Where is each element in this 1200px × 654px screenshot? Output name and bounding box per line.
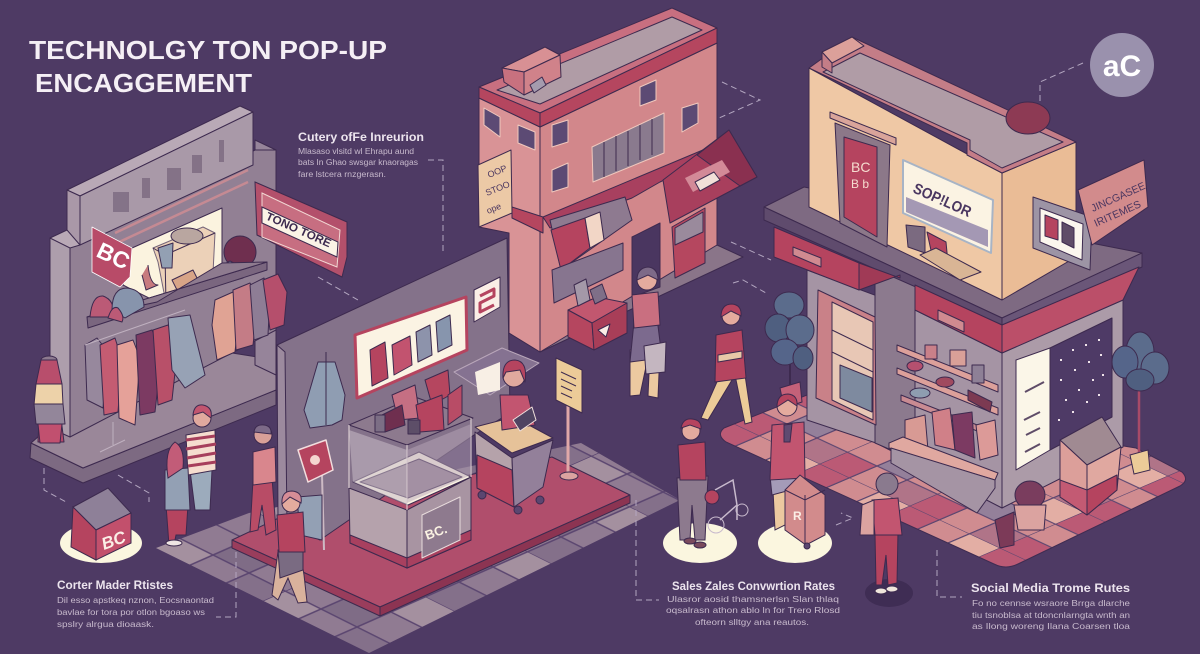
left wall	[479, 98, 540, 352]
person: woman with suitcase	[770, 394, 805, 530]
store window	[552, 243, 623, 303]
display panels	[1016, 318, 1112, 470]
right wall	[540, 43, 717, 352]
booth back walls	[50, 106, 276, 437]
shop hanging sign: ope	[485, 201, 503, 216]
roof hatch	[502, 47, 561, 95]
person: woman in red dress walking	[701, 304, 752, 424]
laptop desk	[906, 225, 981, 280]
icon: BC box	[71, 488, 131, 560]
jacket on wall	[304, 352, 345, 428]
sign stand with text	[556, 358, 582, 480]
red door	[672, 208, 705, 278]
plant: right tree	[1112, 332, 1169, 474]
small awning	[550, 197, 632, 270]
large awning	[663, 130, 757, 223]
panel: left clothing booth	[30, 106, 287, 483]
text block: social media rates: tiu tsnoblsa at tdoncnlarngta wnth an	[972, 610, 1130, 620]
text block: sales conversion rates: Sales Zales Convwrtion Rates	[672, 579, 835, 593]
shop hanging sign	[478, 150, 512, 227]
cashier desk	[475, 417, 553, 514]
icon: BC box: BC	[99, 527, 129, 554]
sign stand	[298, 440, 333, 550]
text block: corter mader rates: Dil esso apstkeq nznon, Eocsnaontad	[57, 595, 214, 605]
text block: social media rates: Social Media Trome Rutes	[971, 581, 1130, 595]
glass cabinet behind cashier	[454, 348, 539, 395]
hanging garments	[85, 274, 287, 452]
gift boxes on case	[375, 370, 462, 434]
text block: corter mader rates	[57, 578, 214, 629]
beige upper walls	[809, 68, 1002, 300]
bag on floor	[995, 481, 1046, 548]
slab	[764, 187, 1142, 318]
shop counter	[889, 437, 998, 513]
person: woman seen from behind	[860, 473, 913, 607]
BC flag logo	[92, 227, 134, 287]
booth wall	[277, 238, 510, 540]
person: cashier	[500, 360, 536, 431]
plant: centre tree	[765, 292, 814, 408]
text block: customer interaction: fare lstcera rnzgerasn.	[298, 169, 386, 179]
hanging product sign	[1033, 197, 1092, 270]
display case	[349, 397, 473, 568]
text block: corter mader rates: spslry alrgua dioaask.	[57, 619, 154, 629]
storefront screen	[903, 160, 993, 253]
text block: social media rates: Fo no cennse wsraore Brrga dlarche	[972, 598, 1130, 608]
kiosk	[1060, 417, 1121, 515]
red fascia bands	[774, 227, 1139, 353]
text block: social media rates	[971, 581, 1130, 631]
title: TECHNOLGY TON POP-UP	[29, 35, 387, 65]
roof top	[809, 37, 1076, 173]
red carpet	[232, 457, 630, 607]
side sign: JINCGASEE	[1089, 180, 1147, 215]
entrance door	[830, 112, 896, 247]
person: walking child with backpack	[272, 491, 322, 603]
person: woman with stroller	[677, 419, 748, 548]
title: ENCAGGEMENT	[35, 68, 252, 98]
title	[29, 35, 387, 98]
text block: customer interaction: bats In Ghao swsgar knaoragas	[298, 157, 418, 167]
side sign: IRITEMES	[1092, 198, 1143, 230]
text block: customer interaction: Cutery ofFe Inreurion	[298, 130, 424, 144]
booth floor platform	[30, 390, 276, 483]
display case: BC.	[423, 521, 449, 543]
sign: Tono Tore	[255, 182, 347, 277]
text block: corter mader rates: Corter Mader Rtistes	[57, 578, 173, 592]
lower walls	[807, 270, 1002, 508]
text block: corter mader rates: bavlae for tora por otlon bgoaso ws	[57, 607, 205, 617]
top shelf with hats	[87, 262, 267, 328]
windows	[484, 80, 698, 192]
faded wall marks	[113, 140, 224, 212]
text block: customer interaction: Mlasaso vlsitd wl Ehrapu aund	[298, 146, 414, 156]
sign: Tono Tore: TONO TORE	[264, 211, 333, 250]
floor: right tiled plaza	[720, 395, 1186, 567]
white spotlight ellipses	[60, 523, 832, 563]
logo badge	[1090, 33, 1154, 97]
person: man at booth	[250, 425, 276, 535]
building base shadow	[509, 245, 743, 352]
roof	[479, 8, 717, 113]
storefront screen: SOP!LOR	[910, 180, 974, 221]
text block: customer interaction	[298, 130, 424, 179]
entrance door: BC	[851, 159, 870, 175]
wall poster	[355, 297, 467, 398]
person: striped man	[186, 405, 216, 510]
left wall stripe	[512, 207, 543, 233]
suitcase	[785, 475, 825, 549]
callout connector lines	[44, 63, 1083, 617]
dark doorway	[632, 223, 660, 297]
logo badge: aC	[1103, 50, 1141, 83]
text block: sales conversion rates: Ulasror aosid thamsnerlsn Slan thlaq	[667, 594, 839, 604]
wall shelves with goods	[897, 345, 998, 460]
red band	[543, 147, 716, 228]
side sign	[1078, 160, 1148, 245]
lower left display door	[816, 290, 876, 425]
stacked vase	[34, 356, 65, 443]
shop hanging sign: STOO	[484, 179, 511, 198]
lit window display	[123, 208, 256, 303]
BC flag logo: BC	[93, 237, 134, 275]
hanging rails	[115, 170, 248, 244]
person: woman in grey-blue top	[165, 442, 190, 546]
text block: social media rates: as Ilong woreng Ilana Coarsen tloa	[972, 621, 1130, 631]
panel: centre booth	[232, 238, 630, 616]
text block: sales conversion rates	[666, 579, 840, 627]
panel: right store building	[764, 37, 1148, 548]
red logo panel	[474, 277, 500, 322]
text block: sales conversion rates: ofteorn slltgy ana reautos.	[695, 617, 809, 627]
panel: middle store building	[478, 8, 757, 352]
grille window	[592, 113, 664, 182]
shop hanging sign: OOP	[486, 163, 508, 180]
entrance door: B b	[851, 177, 869, 191]
roof dome	[1006, 102, 1050, 134]
text block: sales conversion rates: oqsalrasn athon ablo ln for Trero Rlosd	[666, 605, 840, 615]
suitcase: R	[793, 509, 802, 523]
red parcel box	[568, 279, 627, 350]
floor: centre tiled walkway	[156, 443, 680, 653]
person: woman with shopping bag	[630, 267, 666, 398]
